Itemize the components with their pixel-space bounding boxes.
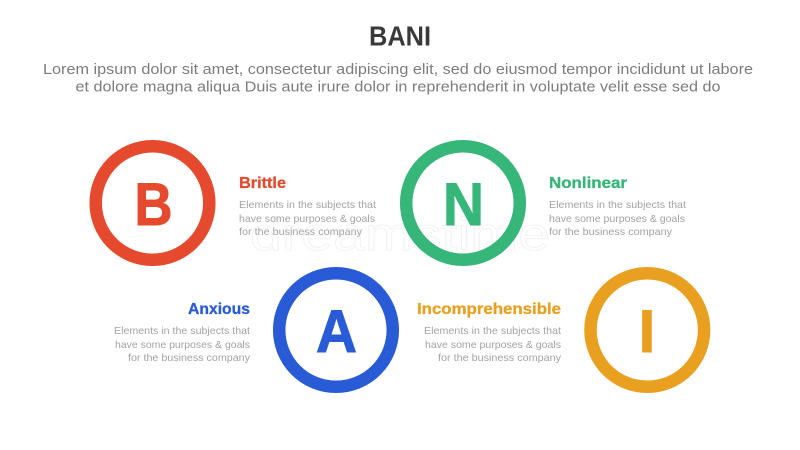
subtitle text bbox=[43, 61, 753, 96]
heading: Anxious: Anxious bbox=[188, 301, 250, 318]
text block: Brittle description bbox=[239, 199, 376, 238]
text: dreamstime bbox=[250, 208, 550, 260]
heading: Incomprehensible: Incomprehensible bbox=[417, 301, 561, 318]
text block: Brittle description: Elements in the subjects that bbox=[239, 199, 376, 211]
text block: Incomprehensible description: have some purposes & goals bbox=[425, 339, 561, 351]
icon: circle B: B bbox=[134, 171, 172, 238]
text block: Nonlinear description: have some purposes & goals bbox=[549, 213, 685, 225]
text block: Nonlinear description: Elements in the subjects that bbox=[549, 199, 686, 211]
text block: Anxious description: Elements in the subjects that bbox=[114, 325, 250, 337]
heading: Brittle: Brittle bbox=[239, 175, 286, 192]
heading: Nonlinear: Nonlinear bbox=[549, 175, 627, 192]
icon: circle A: A bbox=[316, 298, 357, 365]
icon: circle I bbox=[590, 273, 704, 387]
text block: Incomprehensible description: for the business company bbox=[438, 352, 562, 364]
icon: circle B bbox=[96, 146, 209, 260]
text block: Anxious description: have some purposes & goals bbox=[115, 339, 250, 351]
text block: Incomprehensible description: Elements in the subjects that bbox=[424, 325, 561, 337]
panel: Anxious bbox=[114, 273, 393, 387]
subtitle text: Lorem ipsum dolor sit amet, consectetur adipiscing elit, sed do eiusmod tempor incididunt ut labore bbox=[43, 61, 753, 78]
icon: circle I: I bbox=[639, 298, 655, 365]
subtitle text: et dolore magna aliqua Duis aute irure dolor in reprehenderit in voluptate velit esse sed do bbox=[76, 78, 720, 96]
text block: Nonlinear description: for the business company bbox=[549, 226, 673, 238]
text block: Brittle description: have some purposes & goals bbox=[239, 213, 375, 225]
icon: circle A bbox=[279, 273, 393, 387]
text block: Incomprehensible description bbox=[424, 325, 562, 364]
panel: Incomprehensible bbox=[417, 273, 704, 387]
text block: Nonlinear description bbox=[549, 199, 686, 238]
icon: circle N: N bbox=[443, 171, 484, 238]
title: BANI bbox=[369, 20, 431, 52]
icon: circle N bbox=[406, 146, 520, 260]
panel: Brittle bbox=[96, 146, 376, 260]
text block: Brittle description: for the business company bbox=[239, 226, 363, 238]
text block: Anxious description: for the business company bbox=[128, 352, 251, 364]
panel: Nonlinear bbox=[406, 146, 686, 260]
text block: Anxious description bbox=[114, 325, 251, 364]
